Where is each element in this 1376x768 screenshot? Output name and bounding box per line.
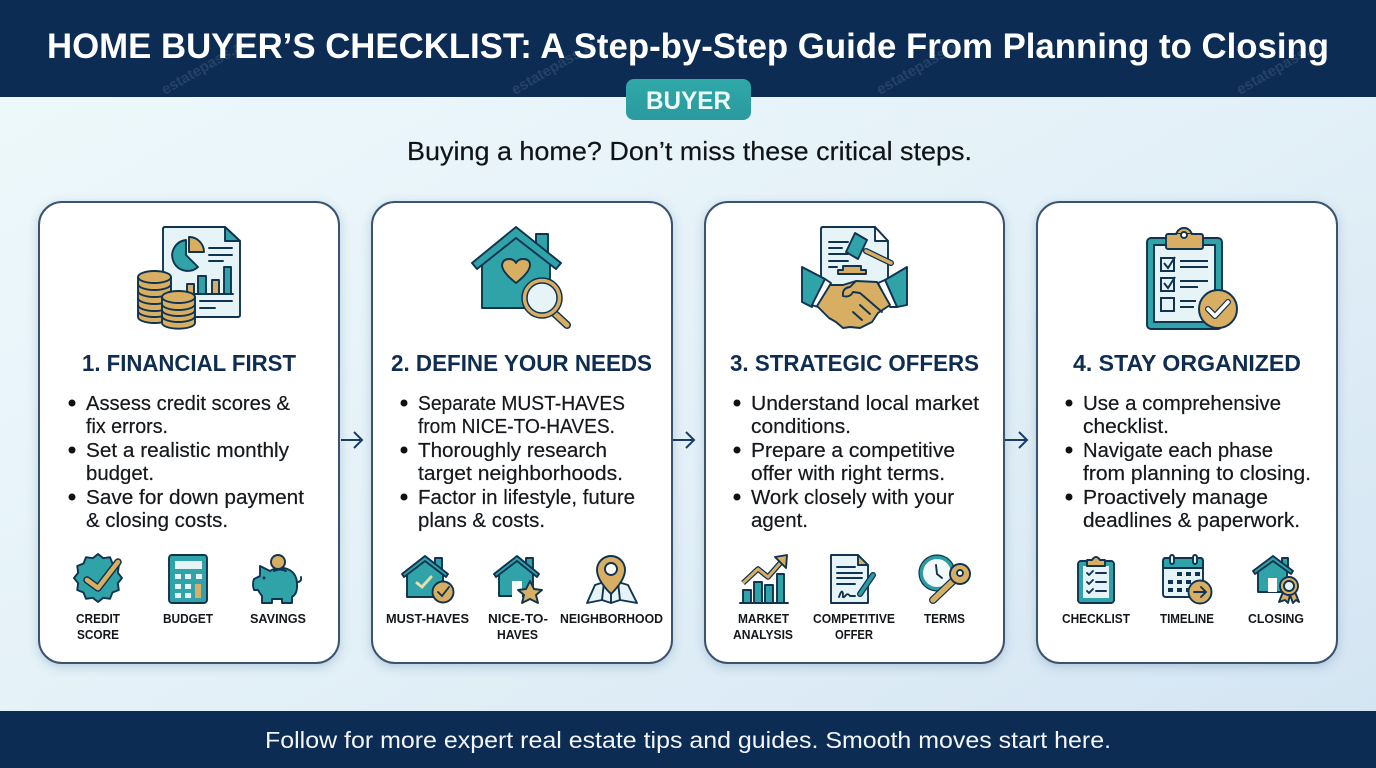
bullet list: Separate MUST-HAVES bbox=[418, 393, 625, 415]
header band: estatepass.ai bbox=[508, 37, 599, 98]
bullet list: from NICE-TO-HAVES. bbox=[418, 416, 615, 438]
label: closing: CLOSING bbox=[1248, 612, 1304, 626]
label: must-haves: MUST-HAVES bbox=[386, 612, 469, 626]
header band: estatepass.ai bbox=[158, 37, 249, 98]
footer band bbox=[0, 711, 1376, 768]
bullet list bbox=[1066, 393, 1311, 532]
heading: 3. STRATEGIC OFFERS bbox=[730, 350, 979, 376]
bullet list bbox=[400, 393, 635, 532]
label: savings: SAVINGS bbox=[250, 612, 306, 626]
arrow: step 1 to 2 bbox=[341, 432, 362, 448]
heading: 4. STAY ORGANIZED bbox=[1073, 350, 1301, 376]
icon: financial document and coins bbox=[138, 227, 240, 329]
bullet list: target neighborhoods. bbox=[418, 463, 623, 485]
icon: gavel document and handshake bbox=[802, 227, 907, 328]
bullet list: budget. bbox=[86, 463, 154, 485]
icon: closing house with ribbon bbox=[1253, 556, 1299, 603]
label: checklist: CHECKLIST bbox=[1062, 612, 1130, 626]
bullet list: agent. bbox=[751, 510, 808, 532]
icon: piggy bank bbox=[253, 555, 301, 603]
bullet list: plans & costs. bbox=[418, 510, 545, 532]
header band bbox=[0, 0, 1376, 98]
header band: estatepass.ai bbox=[1234, 37, 1324, 98]
icon: credit score badge bbox=[74, 554, 122, 602]
arrow: step 3 to 4 bbox=[1005, 432, 1027, 448]
icon: clipboard with check badge bbox=[1147, 228, 1237, 329]
label: competitive offer: COMPETITIVE bbox=[813, 612, 895, 626]
icon: house with heart and magnifier bbox=[472, 227, 567, 325]
label: competitive offer bbox=[813, 612, 895, 642]
bullet list: & closing costs. bbox=[86, 510, 228, 532]
panel: 2 define your needs bbox=[372, 202, 672, 663]
icon: neighborhood pin and map bbox=[587, 556, 637, 603]
bullet list: Proactively manage bbox=[1083, 487, 1268, 509]
label: timeline: TIMELINE bbox=[1160, 612, 1214, 626]
icon: checklist bbox=[1078, 557, 1114, 603]
bullet list bbox=[68, 393, 304, 532]
icon: competitive offer document bbox=[831, 555, 873, 603]
bullet list: Prepare a competitive bbox=[751, 440, 955, 462]
heading: 1. FINANCIAL FIRST bbox=[82, 350, 297, 376]
label: credit score: CREDIT bbox=[76, 612, 120, 626]
heading: 2. DEFINE YOUR NEEDS bbox=[391, 350, 652, 376]
bullet list: fix errors. bbox=[86, 416, 168, 438]
bullet list: Use a comprehensive bbox=[1083, 393, 1281, 415]
bullet list: Thoroughly research bbox=[418, 440, 607, 462]
label: credit score: SCORE bbox=[77, 628, 119, 642]
label: neighborhood: NEIGHBORHOOD bbox=[560, 612, 663, 626]
icon: timeline calendar bbox=[1163, 555, 1212, 604]
bullet list: Set a realistic monthly bbox=[86, 440, 289, 462]
label: credit score bbox=[76, 612, 120, 642]
header band: estatepass.ai bbox=[874, 37, 964, 98]
bullet list: Assess credit scores & bbox=[86, 393, 291, 415]
bullet list: Navigate each phase bbox=[1083, 440, 1273, 462]
icon: clock and key bbox=[919, 555, 970, 600]
label: market analysis: ANALYSIS bbox=[733, 628, 793, 642]
bullet list bbox=[734, 393, 979, 532]
icon: calculator bbox=[169, 555, 207, 603]
icon: market analysis chart bbox=[740, 555, 788, 603]
title: HOME BUYER’S CHECKLIST: A Step-by-Step Guide From Planning to Closing bbox=[47, 27, 1329, 66]
arrow: step 2 to 3 bbox=[673, 432, 694, 448]
label: competitive offer: OFFER bbox=[835, 628, 873, 642]
icon: must-haves house bbox=[402, 556, 454, 602]
panel: 1 financial first bbox=[39, 202, 339, 663]
label: market analysis bbox=[733, 612, 793, 642]
bullet list: conditions. bbox=[751, 416, 851, 438]
bullet list: Factor in lifestyle, future bbox=[418, 487, 635, 509]
bullet list: from planning to closing. bbox=[1083, 463, 1311, 485]
bullet list: offer with right terms. bbox=[751, 463, 945, 485]
panel: 3 strategic offers bbox=[705, 202, 1004, 663]
panel: 4 stay organized bbox=[1037, 202, 1337, 663]
bullet list: deadlines & paperwork. bbox=[1083, 510, 1300, 532]
badge: buyer: BUYER bbox=[646, 87, 731, 115]
label: nice-to-haves bbox=[488, 612, 548, 642]
label: nice-to-haves: NICE-TO- bbox=[488, 612, 548, 626]
label: budget: BUDGET bbox=[163, 612, 213, 626]
label: terms: TERMS bbox=[924, 612, 965, 626]
icon: nice-to-haves house bbox=[494, 556, 542, 603]
bullet list: Understand local market bbox=[751, 393, 979, 415]
subtitle: Buying a home? Don’t miss these critical steps. bbox=[407, 136, 972, 166]
bullet list: Work closely with your bbox=[751, 487, 954, 509]
bullet list: Save for down payment bbox=[86, 487, 304, 509]
label: nice-to-haves: HAVES bbox=[497, 628, 538, 642]
badge: buyer bbox=[626, 79, 751, 120]
bullet list: checklist. bbox=[1083, 416, 1169, 438]
label: market analysis: MARKET bbox=[738, 612, 789, 626]
footer text: Follow for more expert real estate tips and guides. Smooth moves start here. bbox=[265, 727, 1111, 753]
